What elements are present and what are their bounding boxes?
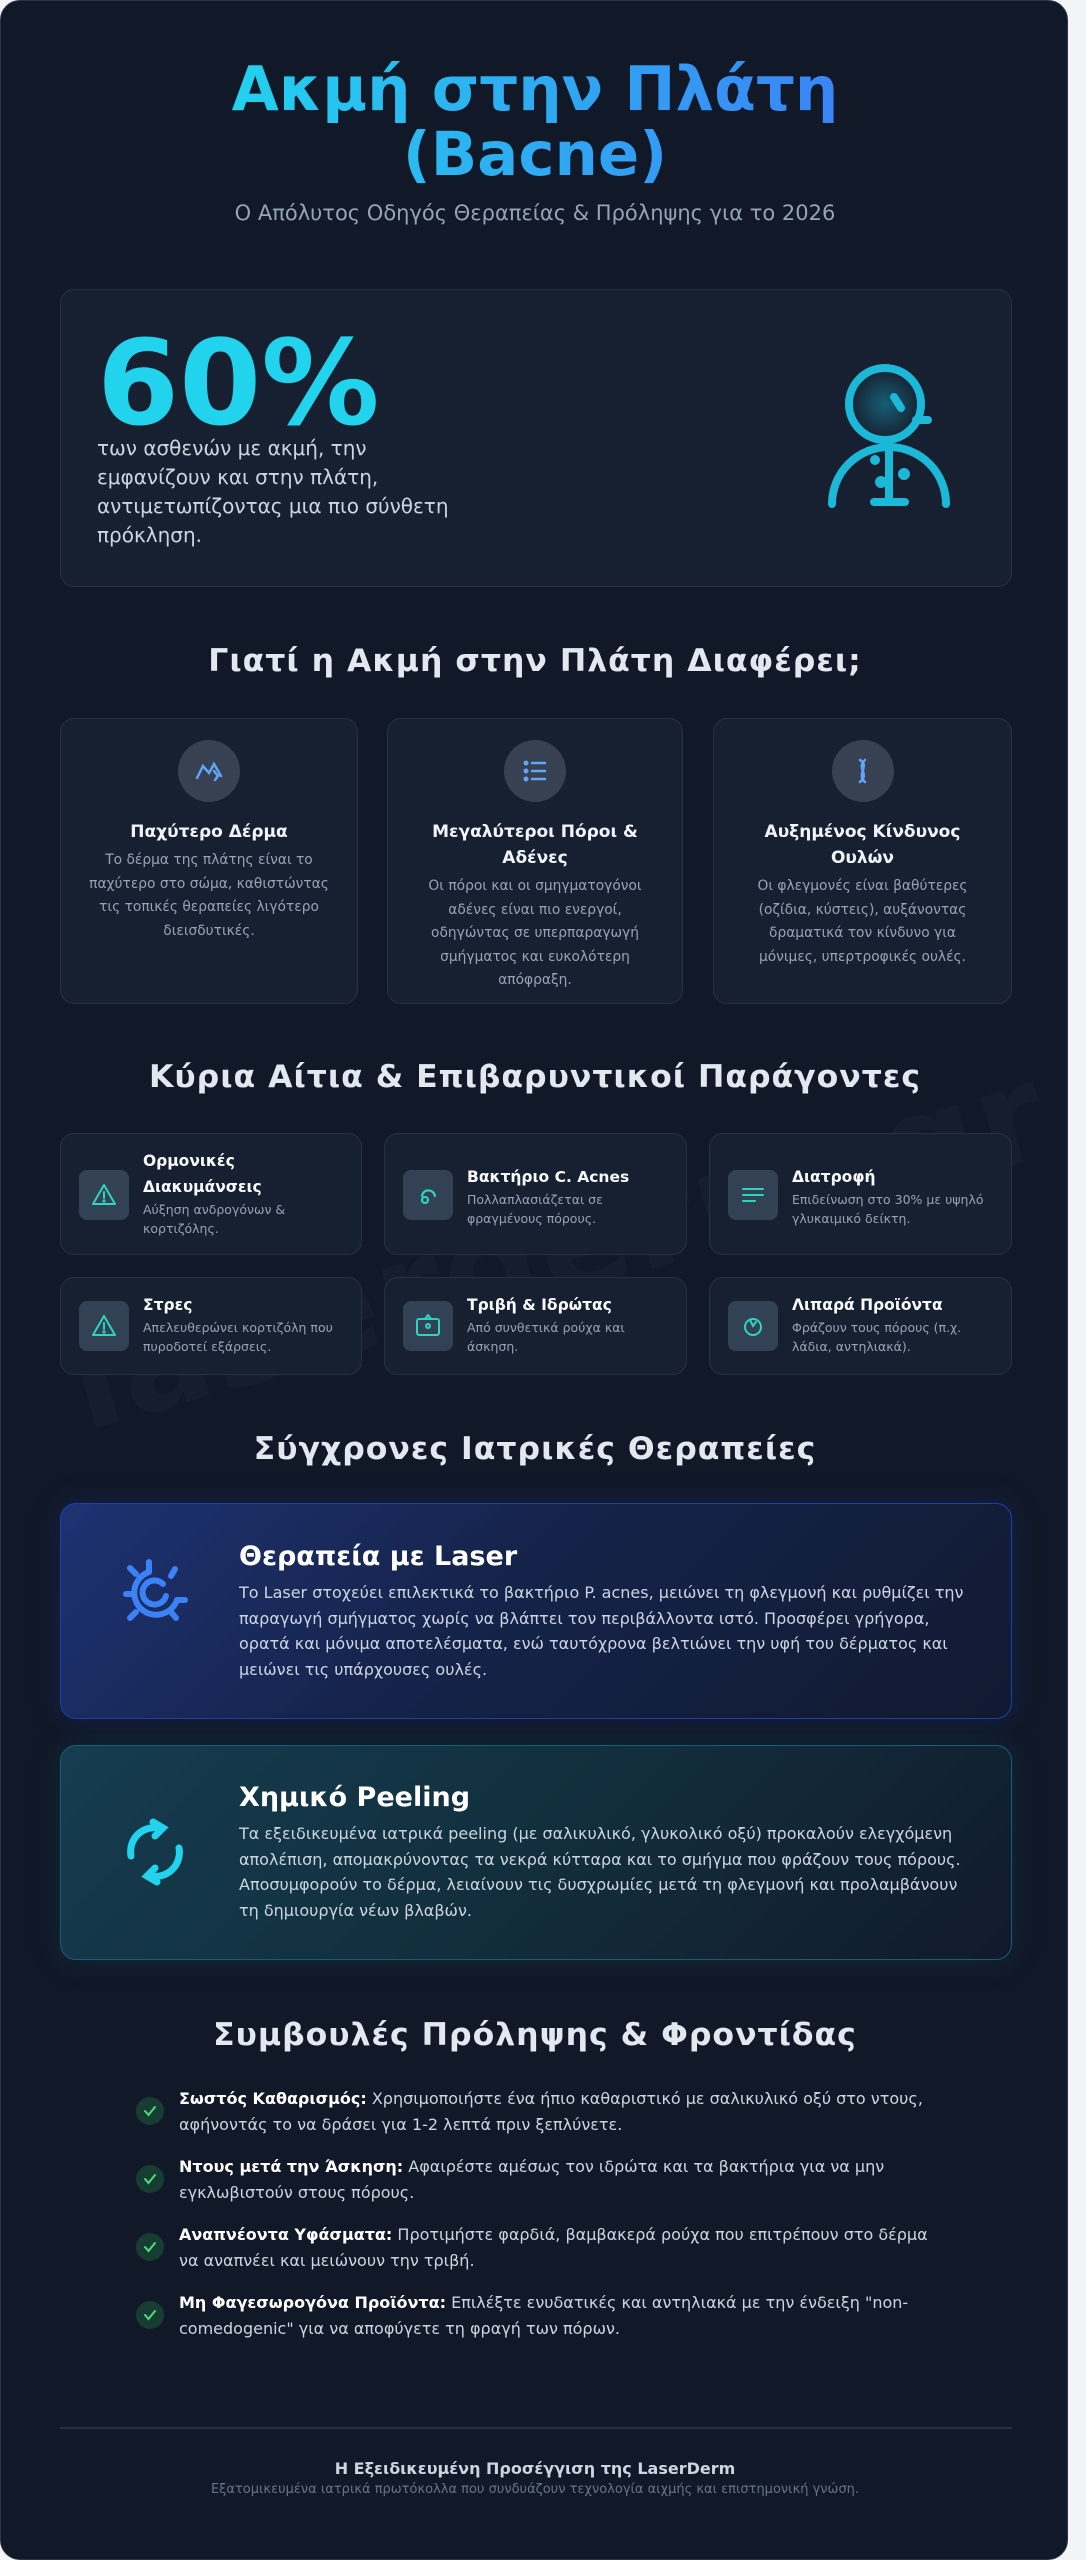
icon: check [136, 2165, 164, 2193]
icon: check [136, 2097, 164, 2125]
panel: chemical peeling [60, 1745, 1012, 1960]
footer: Η Εξειδικευμένη Προσέγγιση της LaserDerm [335, 2459, 735, 2478]
tip 4: Μη Φαγεσωρογόνα Προϊόντα: Επιλέξτε ενυδατικές και αντηλιακά με την ένδειξη "non-comedogenic" για να αποφύγετε τη φραγή των πόρων. [179, 2293, 908, 2338]
title: Ακμή στην Πλάτη [232, 54, 838, 125]
icon: drop [728, 1301, 778, 1351]
panel: stress: Απελευθερώνει κορτιζόλη που πυροδοτεί εξάρσεις. [143, 1320, 333, 1354]
icon: lines [728, 1170, 778, 1220]
tip 2: Ντους μετά την Άσκηση: Αφαιρέστε αμέσως τον ιδρώτα και τα βακτήρια για να μην εγκλωβιστούν στους πόρους. [179, 2157, 884, 2202]
tip 1: Σωστός Καθαρισμός: Χρησιμοποιήστε ένα ήπιο καθαριστικό με σαλικυλικό οξύ στο ντους, αφήνοντάς το να δράσει για 1-2 λεπτά πριν ξεπλύνετε. [179, 2089, 923, 2134]
panel: bacteria: Πολλαπλασιάζεται σε φραγμένους πόρους. [467, 1192, 603, 1226]
panel: oily products: Φράζουν τους πόρους (π.χ. λάδια, αντηλιακά). [792, 1320, 961, 1354]
footer: Εξατομικευμένα ιατρικά πρωτόκολλα που συνδυάζουν τεχνολογία αιχμής και επιστημονική γνώση. [211, 2482, 859, 2497]
panel: friction [384, 1277, 687, 1375]
panel: larger pores: Μεγαλύτεροι Πόροι & Αδένες [432, 822, 638, 868]
panel: hormonal: Ορμονικές Διακυμάνσεις [143, 1152, 262, 1196]
icon: laser [123, 1559, 188, 1621]
icon: bag [403, 1301, 453, 1351]
icon: cycle [127, 1818, 183, 1886]
icon: warning [79, 1170, 129, 1220]
icon: bacteria [403, 1170, 453, 1220]
panel: scar risk: Αυξημένος Κίνδυνος Ουλών [765, 822, 960, 868]
panel: stress [60, 1277, 362, 1375]
panel: thicker skin: Παχύτερο Δέρμα [130, 822, 288, 842]
heading: treatments: Σύγχρονες Ιατρικές Θεραπείες [254, 1431, 816, 1467]
panel: chemical peeling: Τα εξειδικευμένα ιατρικά peeling (με σαλικυλικό, γλυκολικό οξύ) προκαλούν ελεγχόμενη απολέπιση, απομακρύνοντας τα νεκρά κύτταρα και το σμήγμα που φράζουν τους πόρους. Αποσυμφορούν το δέρμα, λειαίνουν τις δυσχρωμίες μετά τη φλεγμονή και προλαμβάνουν [239, 1824, 961, 1894]
subtitle: Ο Απόλυτος Οδηγός Θεραπείας & Πρόληψης για το 2026 [235, 201, 835, 225]
stat number: 60% [97, 314, 379, 452]
panel: friction: Από συνθετικά ρούχα και άσκηση. [467, 1320, 625, 1354]
panel: chemical peeling: τη δημιουργία νέων βλαβών. [239, 1900, 472, 1920]
panel: diet: Επιδείνωση στο 30% με υψηλό γλυκαιμικό δείκτη. [792, 1192, 984, 1226]
footer [211, 2459, 859, 2497]
panel: larger pores [387, 718, 683, 1004]
panel: thicker skin [60, 718, 358, 1004]
heading: causes: Κύρια Αίτια & Επιβαρυντικοί Παράγοντες [149, 1059, 921, 1095]
panel: scar risk: Οι φλεγμονές είναι βαθύτερες (οζίδια, κύστεις), αυξάνοντας δραματικά τον κίνδυνο για μόνιμες, υπερτροφικές ουλές. [757, 878, 968, 964]
icon: check [136, 2233, 164, 2261]
icon: person with back acne [828, 364, 950, 508]
panel: diet [709, 1133, 1012, 1255]
panel: diet: Διατροφή [792, 1168, 875, 1186]
panel: oily products: Λιπαρά Προϊόντα [792, 1296, 943, 1314]
icon: skin [178, 740, 240, 802]
panel: bacteria: Βακτήριο C. Acnes [467, 1168, 629, 1186]
panel: laser: Θεραπεία με Laser [239, 1541, 517, 1572]
stat description: των ασθενών με ακμή, την εμφανίζουν και στην πλάτη, αντιμετωπίζοντας μια πιο σύνθετη πρόκληση. [97, 436, 449, 547]
panel: laser [60, 1503, 1012, 1719]
icon: check [136, 2301, 164, 2329]
icon: dna [832, 740, 894, 802]
panel: stress: Στρες [143, 1296, 192, 1314]
heading: prevention: Συμβουλές Πρόληψης & Φροντίδας [213, 2017, 857, 2053]
stat card [60, 289, 1012, 587]
heading: why: Γιατί η Ακμή στην Πλάτη Διαφέρει; [208, 643, 862, 679]
title: (Bacne) [403, 119, 667, 190]
panel: oily products [709, 1277, 1012, 1375]
watermark: laserderm.gr [51, 1033, 1065, 1462]
title [1, 57, 1069, 187]
panel: hormonal: Αύξηση ανδρογόνων & κορτιζόλης. [143, 1202, 285, 1236]
panel: larger pores: Οι πόροι και οι σμηγματογόνοι αδένες είναι πιο ενεργοί, οδηγώντας σε υπερπαραγωγή σμήγματος και ευκολότερη απόφραξη. [428, 878, 642, 988]
panel: thicker skin: Το δέρμα της πλάτης είναι το παχύτερο στο σώμα, καθιστώντας τις τοπικές θεραπείες λιγότερο διεισδυτικές. [89, 852, 329, 938]
panel: hormonal [60, 1133, 362, 1255]
icon: warning [79, 1301, 129, 1351]
panel: chemical peeling: Χημικό Peeling [239, 1782, 470, 1813]
panel: laser: Το Laser στοχεύει επιλεκτικά το βακτήριο P. acnes, μειώνει τη φλεγμονή και ρυθμίζει την παραγωγή σμήγματος χωρίς να βλάπτει τον περιβάλλοντα ιστό. Προσφέρει γρήγορα, ορατά και μόνιμα αποτελέσματα, ενώ ταυτόχρονα βελτιώνει την υφή του δέρματος και μειώνει τις υπάρχουσες ουλές. [239, 1583, 963, 1678]
panel: scar risk [713, 718, 1012, 1004]
panel: bacteria [384, 1133, 687, 1255]
icon: list [504, 740, 566, 802]
tip 3: Αναπνέοντα Υφάσματα: Προτιμήστε φαρδιά, βαμβακερά ρούχα που επιτρέπουν στο δέρμα να αναπνέει και μειώνουν την τριβή. [179, 2225, 928, 2270]
panel: friction: Τριβή & Ιδρώτας [467, 1296, 612, 1314]
